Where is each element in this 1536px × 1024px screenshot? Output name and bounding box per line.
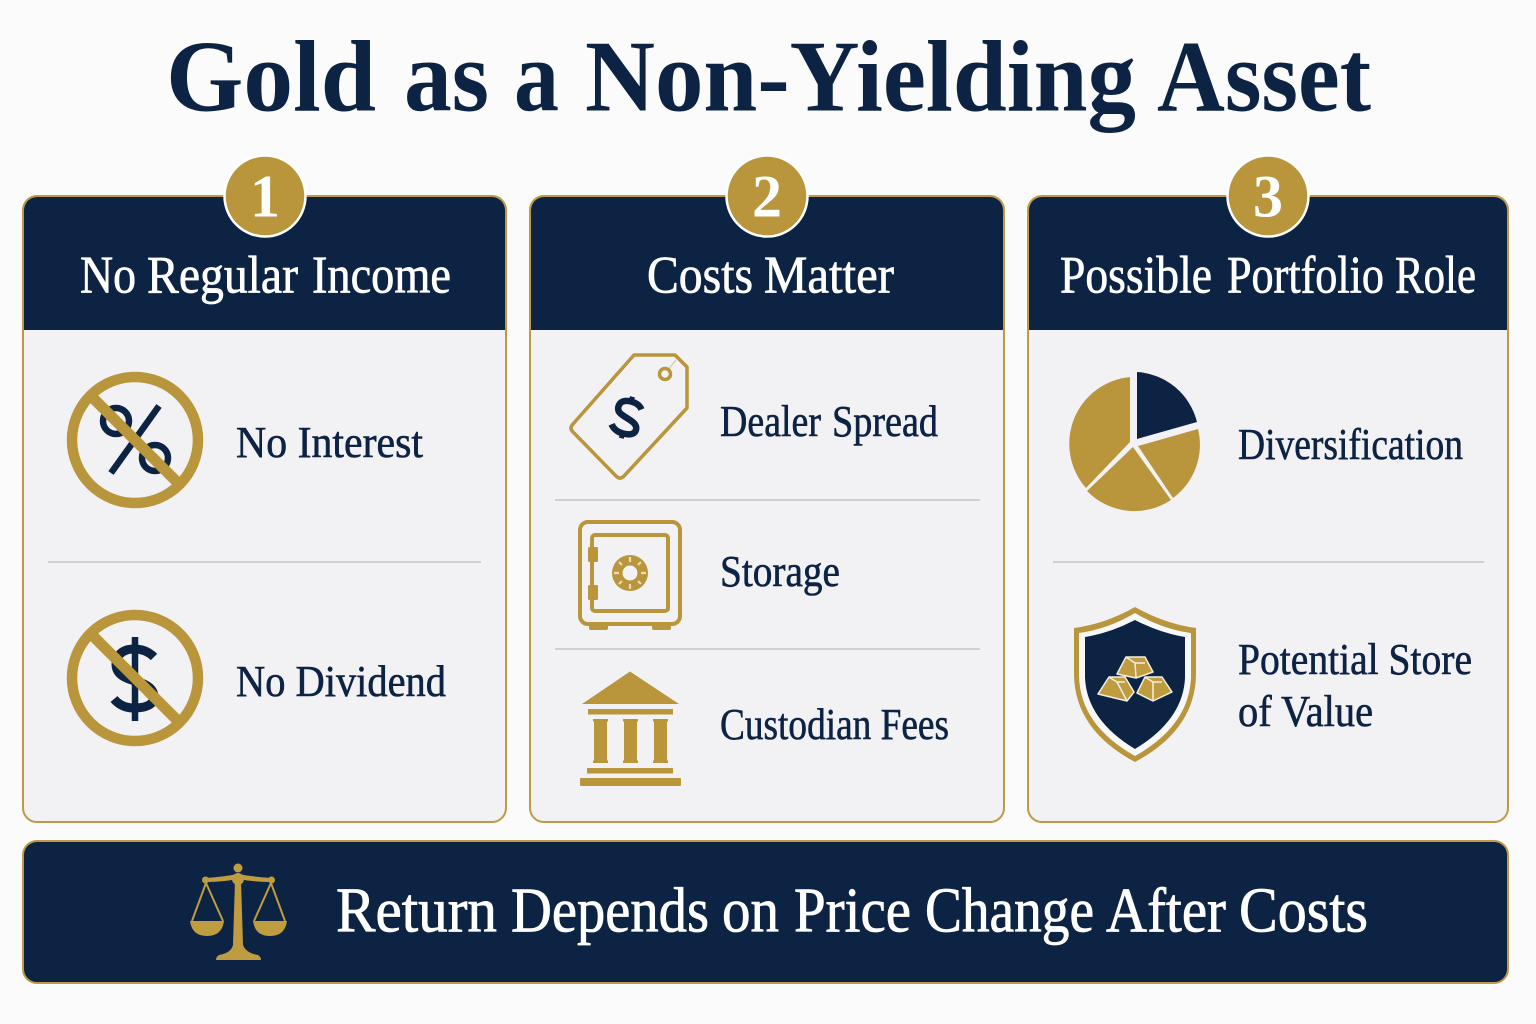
badge 2: 2 — [752, 164, 782, 230]
title: as — [404, 20, 489, 134]
icon: pie chart — [1069, 372, 1200, 511]
panel: no regular income — [23, 156, 506, 822]
badge 3: 3 — [1253, 164, 1283, 230]
banner text — [336, 876, 1368, 946]
banner text: Change — [925, 876, 1094, 946]
heading: costs matter — [647, 246, 894, 304]
title: Non-Yielding — [585, 20, 1136, 134]
label: diversification: Diversification — [1238, 419, 1463, 469]
label: dealer spread: Dealer — [720, 396, 821, 446]
icon: no percent — [72, 377, 198, 503]
banner text: Depends — [511, 876, 709, 946]
banner text: After — [1106, 876, 1226, 946]
heading: costs matter: Matter — [764, 246, 894, 304]
label: potential store of value: of Value — [1238, 686, 1373, 736]
panel: costs matter — [530, 156, 1004, 822]
icon: no dollar — [72, 615, 198, 741]
heading: possible portfolio role — [1060, 246, 1476, 304]
heading: no regular income: Income — [312, 246, 451, 304]
heading: no regular income: No — [80, 246, 136, 304]
icon: bank — [580, 672, 681, 786]
banner: return statement — [23, 841, 1508, 983]
heading: no regular income — [80, 246, 451, 304]
banner text: Return — [336, 876, 497, 946]
banner text: Price — [794, 876, 911, 946]
label: dealer spread: Spread — [832, 396, 938, 446]
title: a — [514, 20, 559, 134]
icon: scales — [190, 864, 287, 960]
icon: price tag — [571, 355, 687, 478]
heading: possible portfolio role: Role — [1395, 246, 1476, 304]
heading: possible portfolio role: Possible — [1060, 246, 1212, 304]
badge 3 — [1228, 156, 1308, 236]
icon: shield with gold bars — [1074, 607, 1196, 762]
label: no interest: No Interest — [236, 417, 424, 467]
label: custodian fees: Custodian Fees — [720, 699, 949, 749]
heading: costs matter: Costs — [647, 246, 753, 304]
badge 1 — [224, 156, 306, 236]
banner text: on — [722, 876, 779, 946]
title: Gold — [166, 20, 376, 134]
label: storage: Storage — [720, 546, 840, 596]
label: dealer spread — [720, 396, 938, 446]
badge 1: 1 — [250, 164, 280, 230]
title — [166, 20, 1371, 134]
label: potential store of value: Potential Store — [1238, 634, 1472, 684]
icon: safe — [580, 522, 680, 630]
badge 2 — [726, 156, 808, 236]
label: no dividend: No Dividend — [236, 656, 446, 706]
heading: possible portfolio role: Portfolio — [1227, 246, 1384, 304]
panel: possible portfolio role — [1028, 156, 1508, 822]
banner text: Costs — [1239, 876, 1368, 946]
label: potential store of value — [1238, 634, 1472, 736]
heading: no regular income: Regular — [147, 246, 298, 304]
title: Asset — [1157, 20, 1371, 134]
